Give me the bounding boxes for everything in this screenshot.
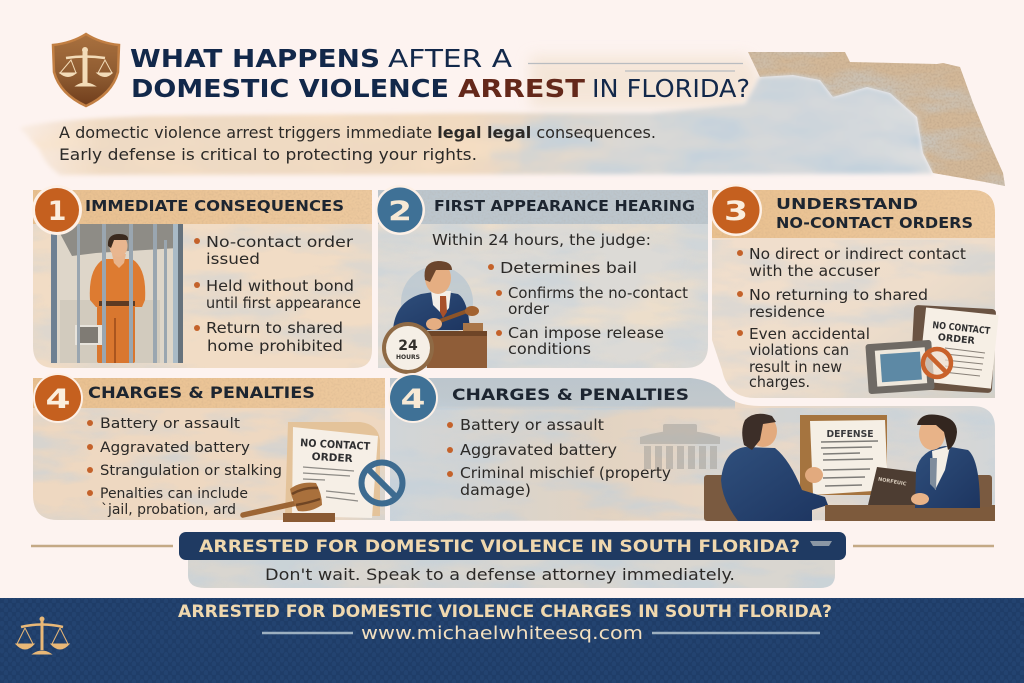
icon: no contact order clipboard and tablet [865, 305, 999, 394]
title [130, 44, 750, 103]
bullet list [194, 233, 361, 355]
bullet list: conditions [508, 340, 591, 358]
bullet list: violations can [749, 341, 849, 359]
panel 4b: charges and penalties with defense attorney meeting [388, 373, 995, 521]
title: WHAT HAPPENS [130, 44, 380, 73]
bullet list [737, 245, 966, 391]
icon: no contact order with gavel: NO CONTACT [300, 437, 371, 453]
title: IN FLORIDA? [592, 74, 750, 103]
bullet list: home prohibited [207, 337, 343, 355]
bullet list [488, 259, 688, 358]
bullet list: Held without bond [206, 277, 354, 295]
heading [776, 195, 973, 232]
icon: attorney and client at desk with defense document: NORFEUIC [878, 477, 907, 488]
panel 1: immediate consequences [32, 185, 372, 368]
bullet list: result in new [749, 358, 842, 376]
panel 2: first appearance hearing [375, 185, 708, 374]
number badge 4: 4 [46, 384, 70, 415]
heading: CHARGES & PENALTIES [88, 383, 315, 402]
title: AFTER A [388, 44, 512, 73]
bullet list [447, 416, 671, 499]
bullet list: Return to shared [206, 319, 343, 337]
number badge 2: 2 [388, 196, 412, 227]
bullet list: Strangulation or stalking [100, 463, 282, 479]
title: DOMESTIC VIOLENCE [131, 74, 449, 103]
bullet list: Aggravated battery [100, 440, 250, 456]
bullet list: Aggravated battery [460, 441, 617, 459]
bullet list: `jail, probation, ard [101, 502, 236, 518]
call to action divider lines [31, 545, 994, 547]
intro text [59, 123, 656, 164]
icon: judge with gavel and 24 hours clock [382, 261, 487, 374]
bullet list: charges. [749, 373, 810, 391]
icon: no contact order clipboard and tablet: ORDER [937, 332, 976, 347]
bullet list: order [508, 300, 550, 318]
bullet list: No returning to shared [749, 286, 928, 304]
heading: CHARGES & PENALTIES [452, 385, 689, 404]
call to action bar: ARRESTED FOR DOMESTIC VIOLENCE IN SOUTH FLORIDA? [199, 537, 800, 556]
bullet list: Determines bail [500, 259, 637, 277]
heading: FIRST APPEARANCE HEARING [434, 197, 695, 215]
icon: footer scales of justice [16, 617, 69, 654]
icon: no contact order clipboard and tablet: NO CONTACT [932, 320, 991, 337]
footer banner [0, 598, 1024, 683]
bullet list: No-contact order [206, 233, 354, 251]
icon: attorney and client at desk with defense document [704, 414, 995, 521]
lead text: Within 24 hours, the judge: [432, 231, 651, 249]
number badge 1 [32, 185, 82, 235]
panel 3: understand no-contact orders [710, 184, 999, 398]
call to action bar [179, 532, 846, 560]
panel 4a: charges and penalties [33, 373, 402, 522]
intro text: Early defense is critical to protecting your rights. [59, 145, 477, 164]
number badge 3: 3 [724, 196, 748, 227]
heading: IMMEDIATE CONSEQUENCES [85, 197, 344, 215]
bullet list: Criminal mischief (property [460, 464, 671, 482]
footer url: www.michaelwhiteesq.com [361, 623, 643, 644]
number badge 4: 4 [400, 384, 426, 415]
bullet list: Confirms the no-contact [508, 284, 688, 302]
bullet list: Battery or assault [460, 416, 604, 434]
bullet list: residence [749, 303, 825, 321]
call to action sub panel [188, 560, 835, 588]
number badge 3 [710, 184, 762, 236]
intro band [23, 72, 934, 177]
icon: courthouse [640, 424, 720, 469]
intro text: A domectic violence arrest triggers immediate legal legal consequences. [59, 123, 656, 142]
bullet list: Can impose release [508, 324, 664, 342]
number badge 1: 1 [48, 196, 66, 227]
bullet list: with the accuser [749, 262, 881, 280]
bullet list: damage) [460, 481, 531, 499]
icon: man in orange jumpsuit behind bars [51, 224, 183, 363]
bullet list: No direct or indirect contact [749, 245, 966, 263]
number badge 4 [388, 373, 438, 423]
title: ARREST [458, 74, 585, 103]
heading: UNDERSTAND [776, 195, 918, 213]
bullet list: Penalties can include [100, 486, 248, 502]
heading: NO-CONTACT ORDERS [776, 214, 973, 232]
icon: judge with gavel and 24 hours clock: HOURS [396, 354, 420, 361]
footer heading: ARRESTED FOR DOMESTIC VIOLENCE CHARGES IN SOUTH FLORIDA? [178, 602, 832, 621]
icon: attorney and client at desk with defense document: DEFENSE [826, 429, 874, 440]
icon: judge with gavel and 24 hours clock: 24 [398, 338, 418, 354]
bullet list: Even accidental [749, 325, 870, 343]
call to action sub panel: Don't wait. Speak to a defense attorney immediately. [265, 565, 735, 584]
bullet list: issued [206, 250, 260, 268]
bullet list: Battery or assault [100, 416, 240, 432]
icon: shield with scales of justice [53, 34, 119, 106]
icon: no contact order with gavel [243, 422, 402, 522]
Florida map watercolor backdrop [528, 45, 1010, 190]
number badge 2 [375, 185, 425, 235]
bullet list: until first appearance [206, 294, 361, 312]
icon: no contact order with gavel: ORDER [311, 451, 353, 465]
bullet list [87, 416, 282, 518]
number badge 4 [33, 373, 83, 423]
